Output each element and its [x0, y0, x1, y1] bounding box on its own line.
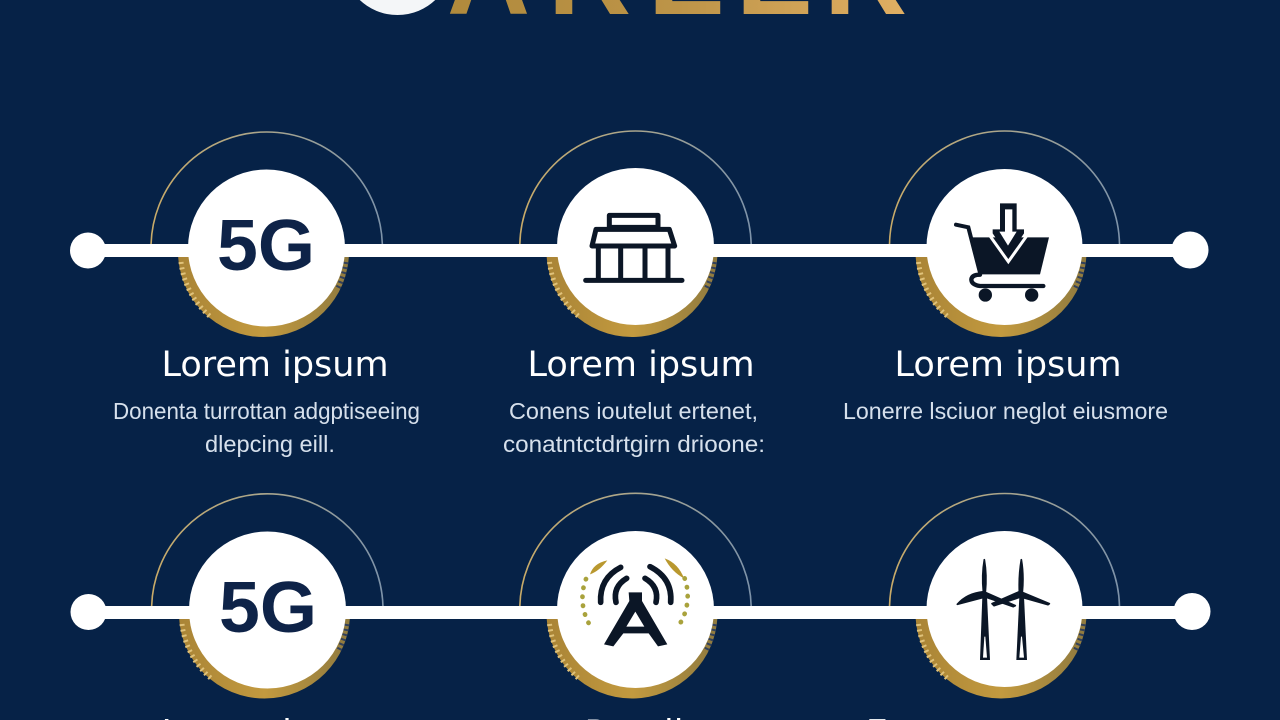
white disc [926, 531, 1082, 687]
white disc [189, 532, 346, 688]
icon: shopping cart with arrow [956, 203, 1049, 302]
panel: step 1 [113, 132, 420, 457]
icon: 5G: 5G [219, 568, 317, 648]
white disc [926, 169, 1082, 325]
body text: Conens ioutelut ertenet, [509, 398, 758, 424]
body text: dlepcing eill. [205, 431, 335, 457]
end dot row 1 [1172, 232, 1208, 268]
gold crescent [916, 619, 1086, 698]
start dot row 2 [70, 594, 106, 630]
arc [888, 492, 1120, 606]
heading: Lorem ipsum [527, 345, 755, 385]
arc [519, 130, 752, 244]
icon: 5G: 5G [217, 206, 315, 286]
title letter C as white disc [342, 0, 452, 15]
panel: step 3 [843, 131, 1168, 424]
arc [888, 130, 1120, 244]
connector line row 1 [88, 244, 1190, 257]
connector line row 2 [88, 606, 1192, 619]
title: career (cropped at top edge) [342, 0, 907, 39]
heading: Lorem ipsum [894, 345, 1122, 385]
timeline row 1 [70, 232, 1208, 268]
arc [150, 493, 384, 606]
panel: step 2 [503, 131, 765, 457]
panel: step 4 [152, 494, 389, 720]
icon: wind turbines [957, 560, 1049, 660]
panel: step 6 [866, 494, 1120, 720]
start dot row 1 [70, 232, 106, 268]
icon: radio tower [582, 558, 688, 646]
arc [519, 492, 752, 606]
gold crescent [179, 619, 350, 698]
icon: storefront [586, 215, 682, 280]
timeline row 2 [70, 593, 1210, 630]
gold crescent [916, 257, 1086, 337]
white disc [557, 168, 714, 325]
body text [503, 398, 765, 457]
heading: Lorem ipsum [161, 345, 389, 385]
arc [150, 131, 384, 244]
body text: Lonerre lsciuor neglot eiusmore [843, 398, 1168, 424]
body text: conatntctdrtgirn drioone: [503, 431, 765, 457]
gold crescent [546, 257, 718, 337]
body text [113, 398, 420, 457]
gold crescent [546, 619, 718, 698]
white disc [557, 531, 714, 688]
body text: Donenta turrottan adgptiseeing [113, 398, 420, 424]
gold crescent [178, 257, 349, 337]
white disc [188, 170, 345, 326]
end dot row 2 [1174, 593, 1210, 630]
panel: step 5 [520, 493, 751, 720]
